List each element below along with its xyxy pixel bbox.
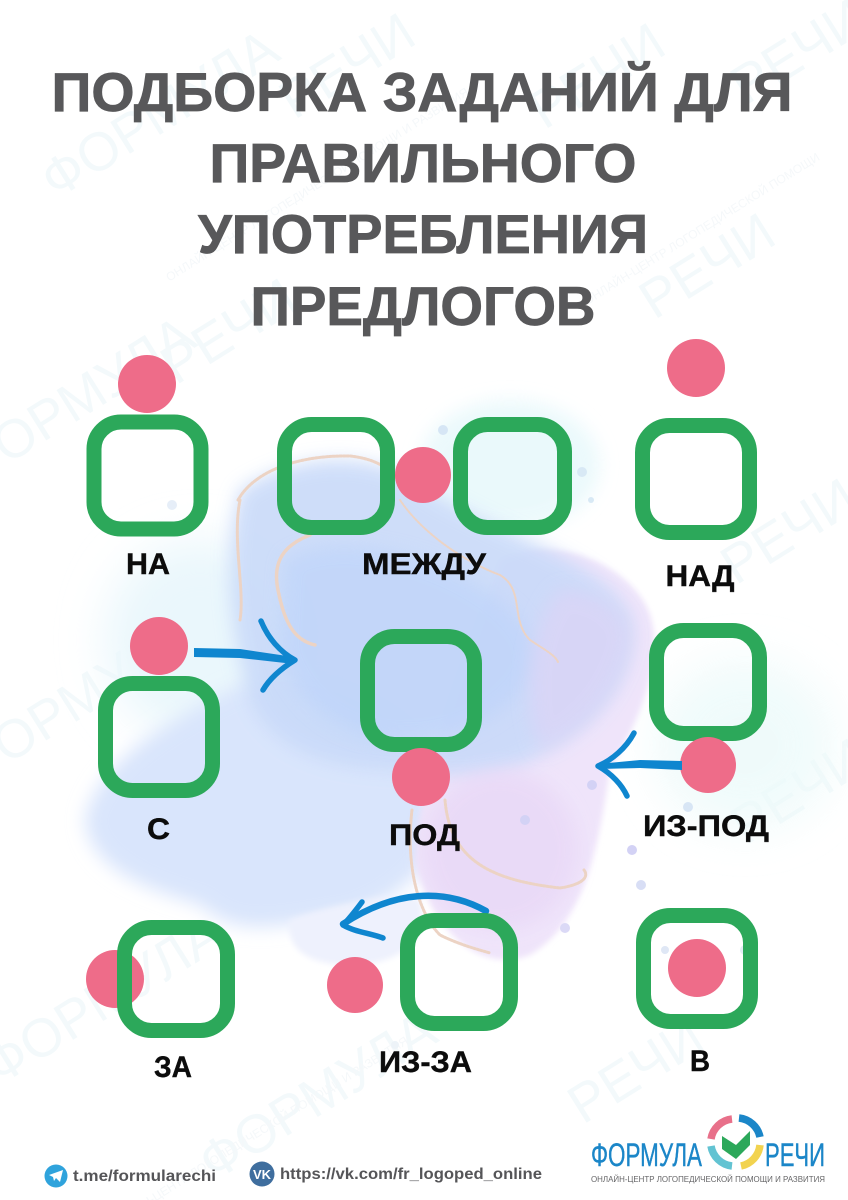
title: ПРАВИЛЬНОГО bbox=[210, 132, 636, 194]
arrow: ИЗ-ПОД bbox=[598, 733, 682, 796]
preposition: ИЗ-ПОД bbox=[598, 630, 769, 843]
title: ПРЕДЛОГОВ bbox=[250, 275, 596, 337]
footer link: vk: https://vk.com/fr_logoped_online bbox=[280, 1166, 542, 1183]
watermark pattern: ОНЛАЙН-ЦЕНТР ЛОГОПЕДИЧЕСКОЙ ПОМОЩИ И РАЗВИТИЯ bbox=[163, 84, 471, 284]
preposition: ИЗ-ЗА bbox=[327, 896, 510, 1079]
arrow: С bbox=[194, 621, 295, 690]
preposition: МЕЖДУ bbox=[284, 424, 564, 581]
logo ring bbox=[711, 1118, 760, 1166]
icon: telegram bbox=[44, 1164, 68, 1188]
watermark pattern: РЕЧИ bbox=[519, 12, 675, 140]
watermark pattern: РЕЧИ bbox=[557, 1006, 714, 1135]
watermark pattern: РЕЧИ bbox=[150, 267, 307, 396]
preposition: В: В bbox=[690, 1045, 710, 1078]
title: ПОДБОРКА ЗАДАНИЙ ДЛЯ bbox=[52, 60, 793, 123]
preposition: ИЗ-ЗА: ИЗ-ЗА bbox=[379, 1046, 472, 1079]
watermark pattern: ФОРМУЛА bbox=[30, 18, 289, 210]
logo checkmark bbox=[722, 1131, 750, 1159]
watermark pattern: РЕЧИ bbox=[269, 2, 425, 130]
preposition: НАД: НАД bbox=[666, 560, 734, 593]
logo: Формула речи: ФОРМУЛА bbox=[591, 1137, 702, 1173]
arrow: ИЗ-ЗА bbox=[343, 896, 486, 938]
preposition: В bbox=[644, 916, 750, 1078]
title: УПОТРЕБЛЕНИЯ bbox=[198, 203, 648, 265]
preposition: МЕЖДУ: МЕЖДУ bbox=[362, 548, 486, 581]
footer link: telegram: t.me/formularechi bbox=[73, 1168, 216, 1185]
preposition: НА: НА bbox=[126, 548, 170, 581]
preposition: НАД bbox=[642, 339, 750, 593]
watermark pattern: ОНЛАЙН-ЦЕНТР ЛОГОПЕДИЧЕСКОЙ ПОМОЩИ bbox=[581, 149, 822, 308]
icon: vk bbox=[250, 1162, 274, 1186]
logo: Формула речи bbox=[591, 1118, 825, 1184]
title bbox=[52, 60, 793, 337]
watermark pattern: ФОРМУЛА bbox=[188, 1000, 447, 1192]
preposition: ПОД: ПОД bbox=[389, 819, 460, 852]
preposition: ПОД bbox=[368, 636, 474, 852]
watermark pattern: РЕЧИ bbox=[629, 202, 785, 330]
preposition: ИЗ-ПОД: ИЗ-ПОД bbox=[643, 810, 769, 843]
preposition: ЗА: ЗА bbox=[154, 1051, 192, 1084]
preposition: С bbox=[106, 617, 295, 846]
preposition: ЗА bbox=[86, 928, 228, 1084]
logo: Формула речи: ОНЛАЙН-ЦЕНТР ЛОГОПЕДИЧЕСКОЙ ПОМОЩИ И РАЗВИТИЯ bbox=[591, 1173, 825, 1184]
watercolor background bbox=[85, 400, 835, 1049]
footer link: vk bbox=[250, 1162, 542, 1186]
preposition: С: С bbox=[147, 813, 170, 846]
footer link: telegram bbox=[44, 1164, 216, 1188]
icon: vk: VK bbox=[253, 1167, 272, 1182]
preposition: НА bbox=[94, 355, 201, 581]
